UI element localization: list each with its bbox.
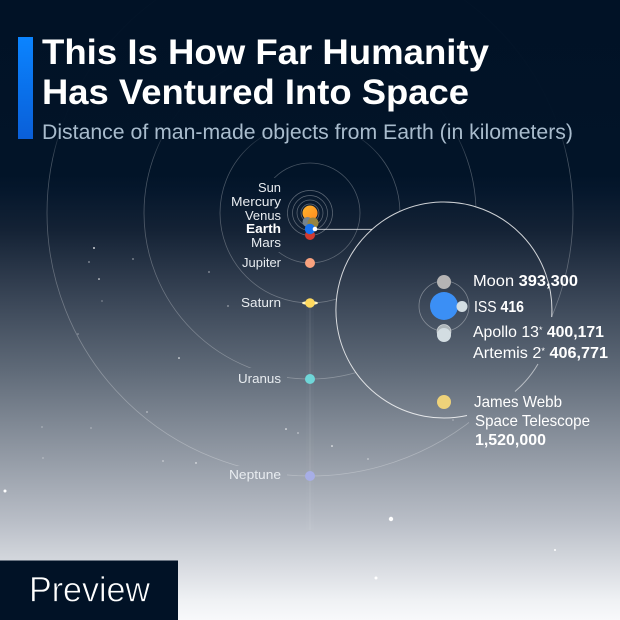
sun: [302, 206, 318, 220]
moon orbit: [419, 281, 469, 331]
preview label: Preview: [29, 570, 151, 610]
zoom circle: [336, 202, 552, 418]
earth marker: [313, 227, 317, 231]
title: This Is How Far Humanity: [42, 33, 490, 72]
solar system labels: Venus: [245, 208, 281, 223]
axis band: [306, 300, 314, 530]
earth large: [430, 292, 458, 320]
solar system labels: Uranus: [238, 371, 281, 386]
connector from earth: [315, 228, 372, 230]
james webb marker: [437, 395, 451, 409]
solar system labels: Earth: [246, 221, 281, 236]
saturn: [302, 298, 318, 308]
james webb label: [474, 394, 590, 449]
artemis label: Artemis 2: [473, 345, 541, 362]
solar system labels: Mercury: [231, 194, 282, 209]
planetary orbits: [46, 128, 574, 476]
solar system labels: Saturn: [241, 295, 281, 310]
apollo 13 marker: [437, 324, 451, 338]
title: Has Ventured Into Space: [42, 73, 469, 112]
mars: [305, 230, 315, 240]
solar system labels: Mars: [251, 235, 282, 250]
solar system labels: Sun: [258, 180, 281, 195]
title accent bar: [18, 37, 33, 139]
stars: [4, 247, 556, 580]
neptune: [305, 471, 315, 481]
artemis label: *: [541, 346, 545, 356]
subtitle: Distance of man-made objects from Earth (in kilometers): [42, 121, 573, 144]
solar system labels: Jupiter: [242, 255, 282, 270]
title: [42, 33, 490, 112]
inner orbits: [288, 190, 332, 236]
venus: [308, 218, 318, 228]
earth: [305, 224, 315, 234]
preview box: [0, 560, 178, 620]
apollo label: 400,171: [547, 324, 604, 341]
uranus: [305, 374, 315, 384]
axis line: [309, 308, 311, 530]
moon label: Moon 393,300: [473, 273, 578, 290]
detail labels: [473, 273, 608, 449]
iss: [456, 301, 468, 312]
james webb label: 1,520,000: [475, 432, 546, 449]
iss label: ISS 416: [474, 299, 524, 316]
mercury: [302, 217, 312, 227]
james webb label: James Webb: [474, 394, 562, 411]
apollo label: Apollo 13: [473, 324, 540, 341]
artemis 2 marker: [437, 328, 451, 342]
artemis label: 406,771: [549, 345, 608, 362]
apollo label: *: [539, 325, 543, 335]
solar system labels: Neptune: [229, 467, 281, 482]
jupiter: [305, 258, 315, 268]
solar system labels: [229, 180, 282, 482]
james webb label: Space Telescope: [475, 413, 590, 430]
moon: [437, 275, 451, 289]
